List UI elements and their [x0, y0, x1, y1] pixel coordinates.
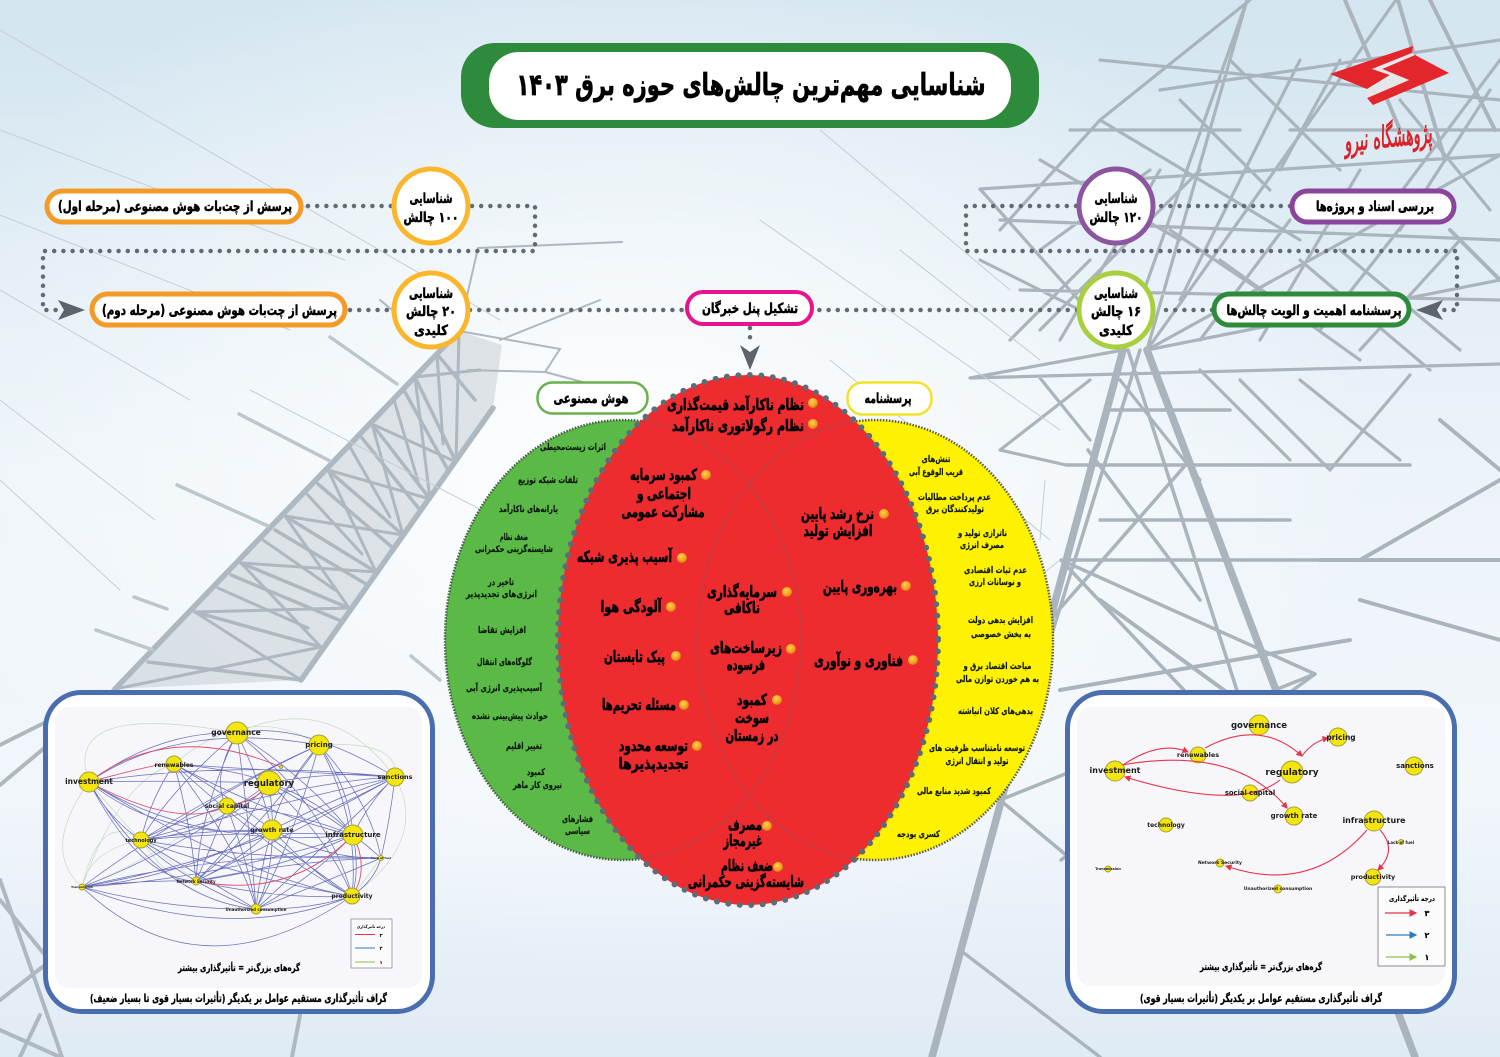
node-size note: گره‌های بزرگ‌تر = تأثیرگذاری بیشتر — [177, 961, 300, 974]
shared challenges: AI and experts: آلودگی هوا — [600, 597, 662, 616]
questionnaire-only challenges list: عدم پرداخت مطالبات — [918, 493, 991, 503]
AI-only challenges list: شایسته‌گزینی حکمرانی — [475, 543, 553, 555]
questionnaire-only challenges list: به بخش خصوصی — [971, 630, 1031, 640]
questionnaire-only challenges list: توسعه نامتناسب ظرفیت های — [929, 744, 1025, 754]
network labels: technology — [125, 838, 157, 844]
legend: درجه تأثیرگذاری — [357, 924, 385, 929]
questionnaire-only challenges list: مباحث اقتصاد برق و — [963, 662, 1032, 672]
shared challenges: AI and experts: مسئله تحریم‌ها — [602, 696, 676, 714]
inner arcs — [640, 420, 856, 860]
AI-only challenges list: ضعف نظام — [500, 533, 528, 543]
panel: strong influence graph (right) — [1068, 692, 1454, 1012]
questionnaire-only challenges list: قریب الوقوع آبی — [909, 466, 963, 478]
legend: ۱ — [1425, 953, 1429, 962]
AI-only challenges list: فشارهای — [562, 815, 593, 825]
network labels: technology — [1147, 822, 1185, 829]
AI-only challenges list — [465, 443, 606, 837]
caption: گراف تأثیرگذاری مستقیم عوامل بر یکدیگر (تأثیرات بسیار قوی) — [1140, 991, 1382, 1005]
set: questionnaire (yellow) — [697, 420, 1053, 860]
questionnaire-only challenges list: تنش‌های — [922, 455, 950, 465]
shared challenges: centre lens: در زمستان — [726, 727, 779, 745]
network labels: Network Security — [176, 879, 216, 884]
network edges: strong — [89, 747, 361, 896]
network labels: Network Security — [1198, 860, 1242, 866]
network labels: regulatory — [244, 779, 295, 789]
pill: expert panel — [687, 292, 812, 324]
legend: درجه تأثیرگذاری — [1389, 894, 1435, 903]
venn diagram — [445, 375, 1053, 905]
circle: 120 challenges: ۱۲۰ چالش — [1090, 210, 1142, 226]
network labels: renewables — [155, 762, 194, 769]
AI-only challenges list: آسیب‌پذیری انرژی آبی — [466, 682, 543, 694]
arrow: to stage two — [58, 300, 85, 320]
AI-only challenges list: اثرات زیست‌محیطی — [540, 443, 606, 453]
questionnaire-only challenges list — [897, 455, 1039, 840]
questionnaire-only challenges list: افزایش بدهی دولت — [968, 616, 1033, 626]
pill: documents review — [1292, 191, 1454, 222]
AI-only challenges list: تاخیر در — [487, 578, 514, 588]
network labels — [65, 728, 413, 912]
network labels: regulatory — [1265, 768, 1319, 778]
label: artificial intelligence: هوش مصنوعی — [554, 391, 628, 407]
shared challenges: AI and experts: توسعه محدود — [619, 737, 688, 755]
legend: ۱ — [379, 960, 383, 966]
network labels: Unauthorized consumption — [1244, 886, 1312, 892]
arrow: down to venn — [740, 345, 760, 370]
network labels: social capital — [1225, 789, 1275, 797]
circle: 16 key challenges: ۱۶ چالش — [1091, 304, 1141, 320]
shared challenges: questionnaire and experts: بهره‌وری پایین — [823, 578, 897, 597]
network labels: productivity — [331, 893, 373, 900]
AI-only challenges list: افزایش تقاضا — [478, 626, 526, 636]
network labels: governance — [211, 728, 261, 737]
label: questionnaire: پرسشنامه — [864, 391, 912, 407]
questionnaire-only challenges list: بدهی‌های کلان انباشته — [958, 707, 1033, 717]
label: questionnaire — [848, 382, 932, 414]
circle: 20 key challenges: کلیدی — [414, 323, 449, 339]
network labels: governance — [1231, 721, 1287, 731]
network edges: weak — [63, 719, 406, 909]
shared challenges: AI and experts: تجدیدپذیرها — [618, 755, 688, 774]
shared challenges: centre lens — [707, 582, 796, 745]
pill: chatbot stage two: پرسش از چت‌بات هوش مصنوعی (مرحله دوم) — [102, 303, 337, 319]
network labels: infrastructure — [325, 831, 381, 839]
questionnaire-only challenges list: تولید و انتقال انرژی — [946, 757, 1008, 767]
AI-only challenges list: سیاسی — [565, 827, 590, 837]
network labels: Lack of fuel — [371, 856, 391, 860]
questionnaire-only challenges list: مصرف انرژی — [960, 541, 1004, 551]
background: right pylon — [760, 0, 1500, 1057]
shared challenges: top: نظام ناکارآمد قیمت‌گذاری — [667, 395, 804, 414]
circle: 120 challenges: شناسایی — [1094, 191, 1138, 207]
questionnaire-only challenges list: عدم ثبات اقتصادی — [964, 566, 1027, 576]
network nodes — [1105, 715, 1423, 893]
caption: گراف تأثیرگذاری مستقیم عوامل بر یکدیگر (تأثیرات بسیار قوی تا بسیار ضعیف) — [90, 991, 387, 1005]
network labels: growth rate — [1271, 812, 1318, 820]
shared challenges: bottom: ضعف نظام — [721, 857, 773, 875]
AI-only challenges list: نیروی کار ماهر — [512, 781, 562, 791]
shared challenges: questionnaire and experts — [801, 505, 918, 670]
shared challenges: centre lens: سرمایه‌گذاری — [707, 582, 777, 601]
shared challenges: top — [667, 395, 818, 435]
shared challenges: questionnaire and experts: نرخ رشد پایین — [801, 505, 874, 524]
legend: ۳ — [1425, 909, 1430, 918]
shared challenges: AI and experts: آسیب پذیری شبکه — [577, 547, 672, 567]
circle: 100 challenges — [394, 169, 468, 243]
network edges: medium — [82, 731, 395, 946]
pill: chatbot stage one: پرسش از چت‌بات هوش مصنوعی (مرحله اول) — [58, 199, 292, 215]
shared challenges: bottom: مصرف — [728, 816, 762, 834]
questionnaire-only challenges list: تولیدکنندگان برق — [926, 503, 984, 515]
network labels: Lack of fuel — [1388, 840, 1415, 845]
pill: expert panel: تشکیل پنل خبرگان — [702, 300, 798, 317]
network labels: Transmission — [71, 885, 93, 889]
shared challenges: questionnaire and experts: فناوری و نوآوری — [814, 651, 903, 670]
title banner — [461, 43, 1039, 128]
legend — [351, 919, 392, 968]
arrow: to questionnaire — [1416, 300, 1443, 320]
shared challenges: AI and experts: اجتماعی و — [636, 485, 691, 503]
network labels: renewables — [1177, 751, 1219, 759]
shared challenges: bottom: غیرمجاز — [723, 832, 762, 850]
shared challenges: bottom: شایسته‌گزینی حکمرانی — [688, 872, 804, 891]
AI-only challenges list: تلفات شبکه توزیع — [518, 476, 578, 486]
questionnaire-only challenges list: کمبود شدید منابع مالی — [917, 787, 992, 797]
questionnaire-only challenges list: ناترازی تولید و — [957, 529, 1007, 539]
shared challenges: AI and experts: مشارکت عمومی — [622, 503, 704, 521]
shared challenges: AI and experts: کمبود سرمایه — [630, 466, 698, 484]
network labels: productivity — [1351, 873, 1396, 881]
network labels: Transmission — [1095, 867, 1121, 871]
network nodes — [79, 722, 404, 914]
shared challenges: AI and experts — [577, 466, 711, 774]
network labels: pricing — [1326, 733, 1356, 742]
set: AI (green) — [445, 420, 801, 860]
network labels: investment — [1090, 766, 1141, 775]
shared challenges: centre lens: سوخت — [735, 709, 769, 727]
AI-only challenges list: تغییر اقلیم — [506, 742, 542, 752]
shared challenges: AI and experts: پیک تابستان — [604, 648, 665, 667]
shared challenges: centre lens: ناکافی — [724, 599, 760, 617]
shared challenges: top: نظام رگولاتوری ناکارآمد — [672, 416, 804, 435]
pill: chatbot stage two — [92, 294, 345, 325]
circle: 16 key challenges: شناسایی — [1094, 286, 1138, 302]
AI-only challenges list: یارانه‌های ناکارآمد — [499, 503, 558, 515]
legend: ۲ — [379, 946, 383, 952]
shared challenges: questionnaire and experts: افزایش تولید — [804, 522, 872, 540]
circle: 16 key challenges — [1079, 273, 1153, 347]
pill: documents review: بررسی اسناد و پروژه‌ها — [1316, 199, 1434, 215]
circle: 120 challenges — [1079, 169, 1153, 243]
AI-only challenges list: حوادث پیش‌بینی نشده — [472, 712, 548, 722]
circle: 20 key challenges — [394, 273, 468, 347]
AI-only challenges list: گلوگاه‌های انتقال — [477, 656, 533, 668]
network labels: pricing — [305, 741, 333, 749]
shared challenges: centre lens: زیرساخت‌های — [710, 639, 782, 657]
legend — [1378, 887, 1445, 966]
network labels: sanctions — [1396, 762, 1434, 770]
questionnaire-only challenges list: به هم خوردن توازن مالی — [956, 675, 1039, 685]
circle: 100 challenges: شناسایی — [410, 191, 452, 207]
shared challenges: bottom — [688, 816, 804, 891]
pill: importance questionnaire: پرسشنامه اهمیت و الویت چالش‌ها — [1226, 303, 1402, 319]
legend: ۳ — [379, 933, 383, 939]
logo: power research institute — [1330, 46, 1449, 160]
circle: 20 key challenges: ۲۰ چالش — [406, 304, 456, 320]
network labels: sanctions — [377, 773, 413, 781]
connector: second-row left dots — [350, 308, 390, 312]
network labels: growth rate — [250, 826, 294, 834]
pill: importance questionnaire — [1214, 294, 1409, 325]
connector: centre dots down — [748, 328, 752, 346]
network labels: infrastructure — [1342, 816, 1406, 825]
circle: 16 key challenges: کلیدی — [1099, 323, 1134, 339]
AI-only challenges list: کمبود — [527, 768, 546, 778]
connector: top-left dotted path — [43, 206, 688, 310]
panel: full influence graph (left) — [46, 692, 432, 1012]
label: artificial intelligence — [538, 382, 648, 414]
set: experts overlap (red) — [558, 375, 938, 905]
network labels: investment — [65, 777, 113, 786]
AI-only challenges list: انرژی‌های تجدیدپذیر — [465, 590, 537, 600]
title banner: شناسایی مهم‌ترین چالش‌های حوزه برق ۱۴۰۳ — [517, 68, 986, 103]
node-size note: گره‌های بزرگ‌تر = تأثیرگذاری بیشتر — [1199, 960, 1322, 973]
network labels — [1090, 721, 1434, 892]
shared challenges: centre lens: فرسوده — [727, 656, 765, 674]
pill: chatbot stage one — [47, 191, 301, 222]
circle: 20 key challenges: شناسایی — [409, 286, 453, 302]
questionnaire-only challenges list: و نوسانات ارزی — [969, 578, 1021, 588]
network labels: Unauthorized consumption — [226, 907, 287, 912]
red dotted outline — [558, 375, 938, 905]
strong influence arrows — [1122, 735, 1389, 875]
legend: ۲ — [1425, 931, 1430, 940]
network labels: social capital — [205, 803, 249, 810]
shared challenges: centre lens: کمبود — [737, 691, 768, 709]
circle: 100 challenges: ۱۰۰ چالش — [404, 210, 458, 226]
connector: top-right dotted path — [815, 206, 1457, 310]
background: left pylon — [0, 30, 622, 1057]
questionnaire-only challenges list: کسری بودجه — [897, 830, 941, 840]
